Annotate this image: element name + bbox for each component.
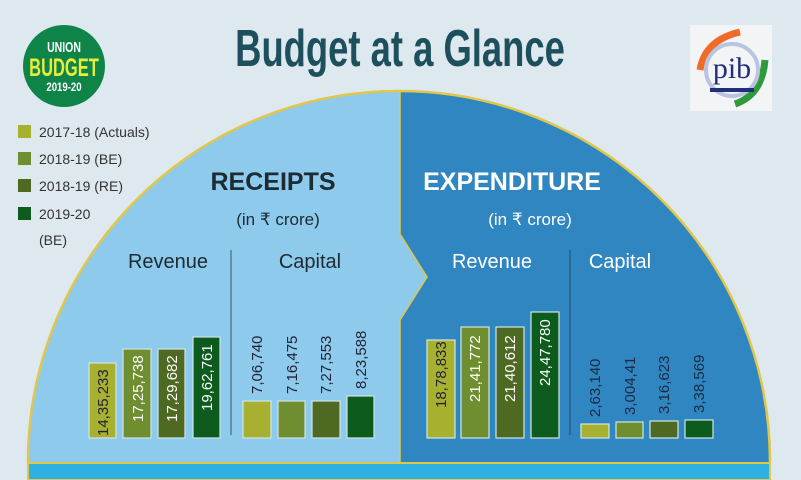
heading: receipts: (in ₹ crore) [236,210,320,229]
logo: pib [690,25,772,111]
bar labels: 17,25,738 [130,355,147,422]
bar labels: 8,23,588 [353,331,370,389]
heading: expenditure [423,168,651,435]
bar labels: 7,06,740 [249,336,266,394]
bar labels: 24,47,780 [537,319,554,386]
bar labels: 7,27,553 [318,336,335,394]
legend: 2019-20 [39,206,91,222]
bar labels: 3,004,41 [622,357,639,415]
bar labels [95,319,708,436]
bar labels: 17,29,682 [164,355,181,422]
title: Budget at a Glance [235,18,565,78]
bar labels: 3,38,569 [691,355,708,413]
bar labels: 21,41,772 [467,335,484,402]
bar chart: all bars [89,312,713,438]
heading: receipts [128,168,341,435]
bar labels: 21,40,612 [502,335,519,402]
bar labels: 18,78,833 [433,341,450,408]
legend: 2017-18 (Actuals) [39,124,150,140]
logo: union budget: BUDGET [29,55,99,82]
heading: receipts: RECEIPTS [210,168,336,196]
heading: expenditure: (in ₹ crore) [488,210,572,229]
legend: 2018-19 (RE) [39,178,123,194]
logo: pib: pib [713,52,751,85]
bar labels: 14,35,233 [95,369,112,436]
panel: expenditure half [400,90,770,462]
legend: 2018-19 (BE) [39,151,122,167]
panel: receipts half [28,90,427,462]
heading: receipts: Revenue [128,251,208,273]
logo: union budget: 2019-20 [46,81,82,94]
bottom band [28,463,770,480]
legend: (BE) [39,232,67,248]
heading: expenditure: Revenue [452,251,532,273]
heading: expenditure: Capital [589,251,651,273]
logo: union budget: UNION [47,38,81,55]
bar labels: 7,16,475 [284,336,301,394]
heading: receipts: Capital [279,251,341,273]
heading: expenditure: EXPENDITURE [423,168,601,196]
bar labels: 2,63,140 [587,359,604,417]
bar labels: 19,62,761 [199,344,216,411]
bar labels: 3,16,623 [656,356,673,414]
legend [18,124,150,248]
logo: union budget [23,25,105,107]
